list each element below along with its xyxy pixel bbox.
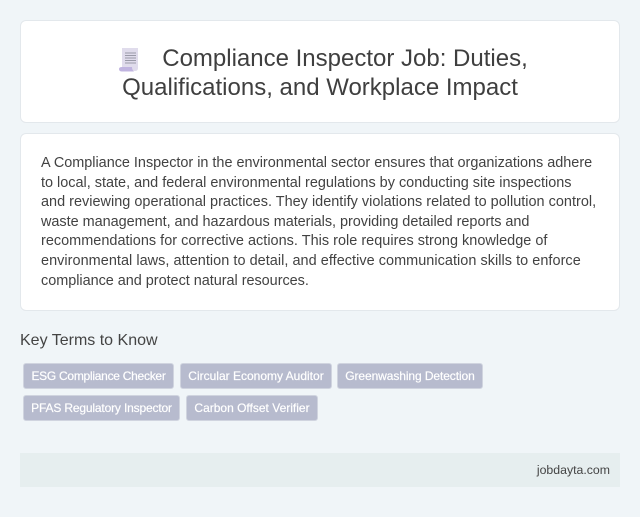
description text: to local, state, and federal environmental regulations by conducting site inspections [41,175,572,191]
tag: PFAS Regulatory Inspector [23,395,180,421]
footer bar [20,453,620,487]
tag: ESG Compliance Checker: ESG Compliance Checker [31,369,166,383]
description text: compliance and protect natural resources. [41,273,309,289]
tag: Circular Economy Auditor: Circular Economy Auditor [188,369,324,383]
title text: Compliance Inspector Job: Duties, [162,45,528,72]
description text: recommendations for corrective actions. This role requires strong knowledge of [41,233,547,249]
footer source text: jobdayta.com [537,463,610,477]
tag: Carbon Offset Verifier: Carbon Offset Verifier [194,401,310,415]
description text: A Compliance Inspector in the environmental sector ensures that organizations adhere [41,155,592,171]
description card [20,133,620,311]
tag: ESG Compliance Checker [23,363,174,389]
tag: Greenwashing Detection: Greenwashing Detection [345,369,475,383]
tag: Circular Economy Auditor [180,363,332,389]
description text: environmental laws, attention to detail, and effective communication skills to enforce [41,253,581,269]
description text [41,155,596,289]
icon: document scroll [119,48,138,72]
title text [122,45,528,100]
tag: Carbon Offset Verifier [186,395,318,421]
description text: waste management, and hazardous materials, providing detailed reports and [41,214,529,230]
tag: PFAS Regulatory Inspector: PFAS Regulatory Inspector [31,401,172,415]
tag: Greenwashing Detection [337,363,483,389]
heading: key terms: Key Terms to Know [20,332,158,349]
title text: Qualifications, and Workplace Impact [122,74,518,100]
description text: and reviewing operational practices. They identify violations related to pollution control, [41,194,596,210]
title card [20,20,620,123]
